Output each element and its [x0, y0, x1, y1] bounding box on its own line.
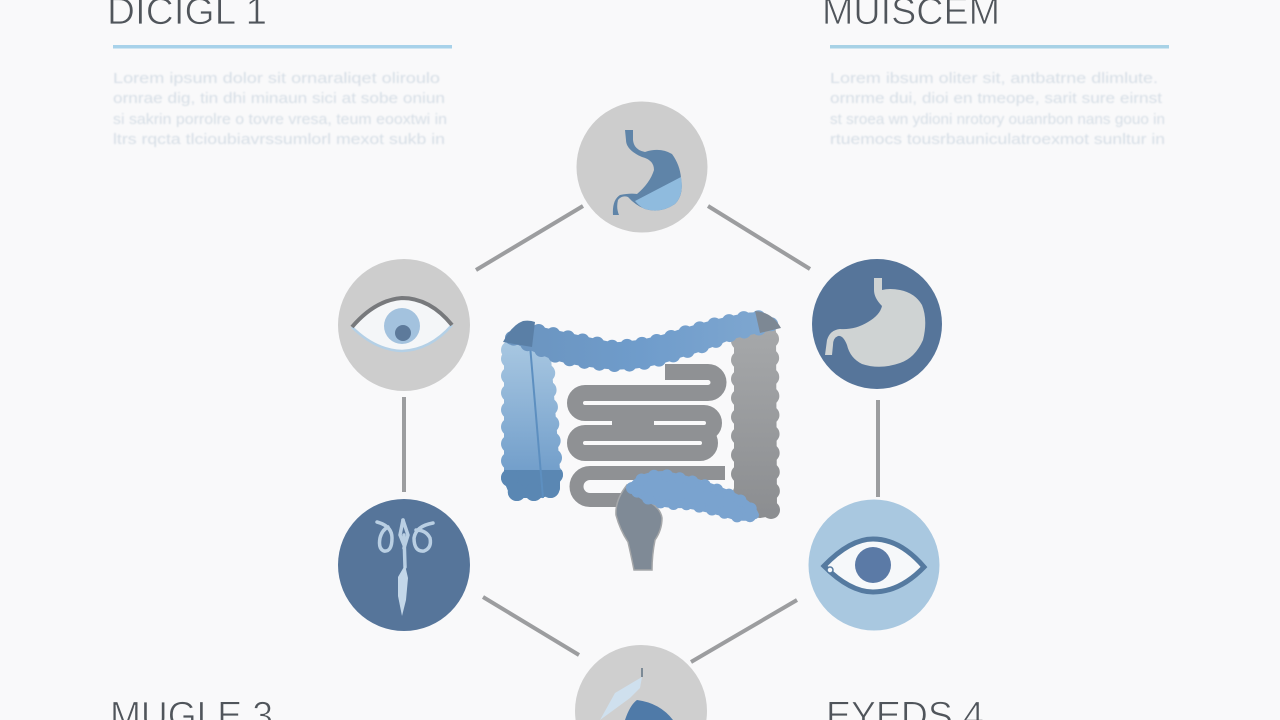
body text left: si sakrin porrolre o tovre vresa, teum eooxtwi in — [113, 111, 447, 128]
divider rule left — [113, 45, 452, 48]
body text left: Lorem ipsum dolor sit ornaraliqet oliroulo — [113, 70, 440, 87]
rectum — [616, 485, 662, 570]
icon: stomach, dark circle right — [812, 259, 942, 389]
small intestine coils — [575, 372, 725, 500]
body text right — [830, 70, 1165, 148]
body text right: st sroea wn ydioni nrotory ouanrbon nans gouo in — [830, 111, 1165, 128]
icon: stomach, grey circle top — [576, 102, 708, 232]
central illustration: intestines — [503, 311, 781, 570]
icon: organ, grey circle bottom — [575, 645, 707, 720]
caecum shaded band — [501, 470, 563, 501]
icon: eye, light blue circle right — [808, 500, 940, 630]
panel: top right text block — [822, 0, 1169, 148]
body text left: ornrae dig, tin dhi minaun sici at sobe oniun — [113, 90, 445, 107]
sigmoid colon — [632, 475, 755, 517]
icon: reproductive organ, dark circle lower left — [338, 499, 470, 631]
body text right: ornrme dui, dioi en tmeope, sarit sure eirnst — [830, 90, 1163, 107]
hexagon connector lines — [404, 206, 878, 662]
transverse colon — [512, 317, 772, 365]
body text right: rtuemocs tousrbauniculatroexmot sunltur in — [830, 131, 1165, 148]
small intestine centre block — [612, 406, 654, 440]
panel: top left text block — [107, 0, 452, 148]
body text right: Lorem ibsum oliter sit, antbatrne dlimlute. — [830, 70, 1158, 87]
divider rule right — [830, 45, 1169, 48]
descending colon — [740, 332, 771, 512]
ascending colon crease — [530, 345, 543, 498]
body text left: ltrs rqcta tlcioubiavrssumlorl mexot sukb in — [113, 131, 445, 148]
colon corner shade right — [755, 311, 781, 333]
body text left — [113, 70, 447, 148]
ascending colon — [510, 350, 554, 492]
icon: eye, grey circle left — [338, 259, 470, 391]
colon corner shade left — [503, 321, 535, 347]
